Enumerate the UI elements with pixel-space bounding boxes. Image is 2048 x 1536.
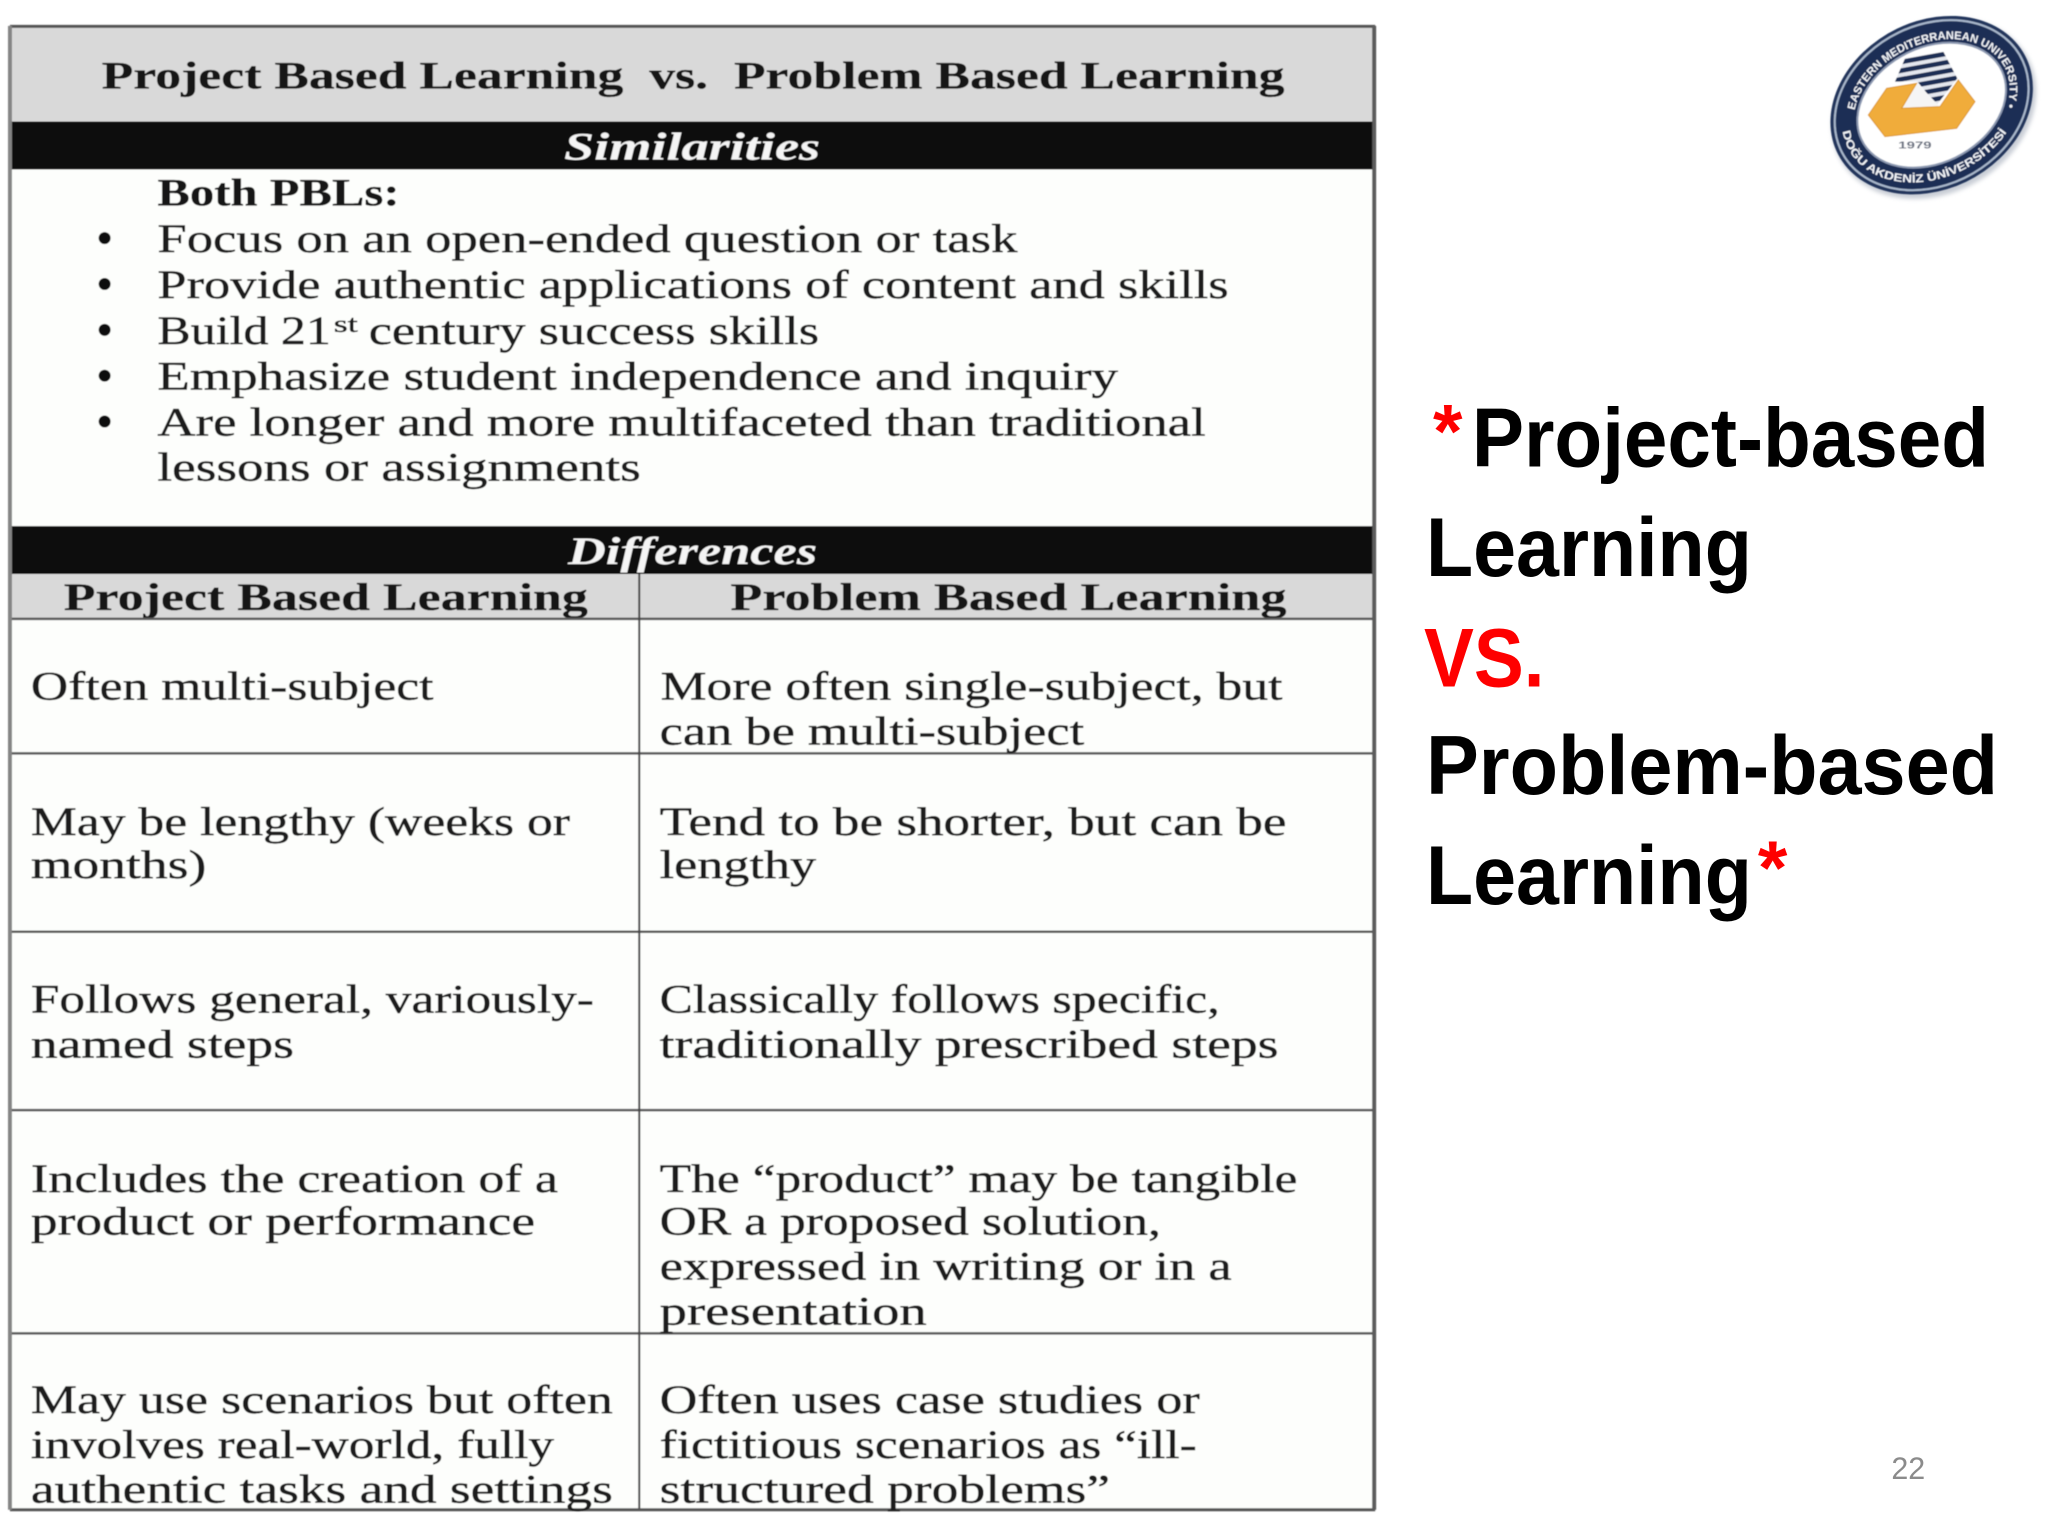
- icon: university seal logo: [1829, 15, 2038, 201]
- seal ring lettering: DOĞU AKDENİZ ÜNİVERSİTESİ: [1842, 126, 2007, 184]
- table rules: [10, 26, 1375, 1510]
- heading star: *: [1433, 389, 1463, 474]
- similarities list: Focus on an open-ended question or task: [157, 216, 1017, 261]
- row: scenarios: Often uses case studies or: [660, 1377, 1200, 1422]
- seal ring: [1830, 15, 2034, 196]
- row: duration: months): [31, 842, 206, 887]
- row: duration: [31, 799, 1286, 887]
- row: duration: Tend to be shorter, but can be: [660, 799, 1286, 844]
- row: steps: Classically follows specific,: [660, 976, 1220, 1021]
- row: scenarios: [31, 1377, 1200, 1512]
- side heading: [1424, 389, 1998, 922]
- column headers: Project Based Learning: [64, 576, 589, 619]
- similarities list: Are longer and more multifaceted than traditional: [157, 399, 1206, 444]
- comparison table: [10, 26, 1375, 1512]
- similarities list: century success skills: [369, 308, 819, 353]
- row: product: OR a proposed solution,: [660, 1199, 1161, 1244]
- row: scenarios: May use scenarios but often: [31, 1377, 613, 1422]
- seal orange emblem: [1868, 80, 1975, 137]
- similarities list: Both PBLs:: [157, 171, 400, 214]
- row: steps: traditionally prescribed steps: [660, 1021, 1279, 1066]
- seal ring lettering: EASTERN MEDITERRANEAN UNIVERSITY •: [1846, 30, 2018, 110]
- heading line: learning: Learning: [1426, 828, 1752, 922]
- row: duration: May be lengthy (weeks or: [31, 799, 570, 844]
- row: scenarios: authentic tasks and settings: [31, 1467, 613, 1512]
- heading line: project-based: Project-based: [1472, 390, 1989, 484]
- similarities heading band: Similarities: [564, 125, 820, 168]
- row: product: presentation: [660, 1288, 927, 1333]
- heading line: problem-based: Problem-based: [1426, 718, 1998, 812]
- differences heading band: Differences: [567, 530, 817, 573]
- table title band: [10, 27, 1375, 122]
- table title band: Project Based Learning vs. Problem Based Learning: [102, 55, 1285, 98]
- column headers: Problem Based Learning: [730, 576, 1287, 619]
- seal ring lettering: [1842, 30, 2018, 184]
- row: steps: named steps: [31, 1021, 294, 1066]
- similarities list: lessons or assignments: [157, 444, 641, 489]
- page number: 22: [1891, 1450, 1925, 1486]
- similarities list: Provide authentic applications of content and skills: [157, 262, 1229, 307]
- similarities list: Emphasize student independence and inquiry: [157, 354, 1118, 399]
- column headers: [10, 574, 1375, 619]
- heading end star: *: [1758, 826, 1788, 911]
- similarities list: Build 21: [157, 308, 331, 353]
- heading line: learning: Learning: [1426, 500, 1752, 594]
- row: product: expressed in writing or in a: [660, 1244, 1232, 1289]
- row: steps: Follows general, variously-: [31, 976, 594, 1021]
- row: product: product or performance: [31, 1199, 535, 1244]
- heading line: vs: VS.: [1424, 611, 1545, 705]
- seal striped emblem: [1894, 51, 1958, 104]
- similarities list: [99, 171, 1229, 489]
- differences heading band: [10, 526, 1375, 574]
- seal shadow: [1803, 0, 2048, 232]
- seal year: 1979: [1898, 140, 1932, 151]
- row: subject scope: [31, 664, 1282, 753]
- row: subject scope: Often multi-subject: [31, 664, 433, 709]
- row: scenarios: fictitious scenarios as “ill-: [660, 1422, 1197, 1467]
- row: duration: lengthy: [660, 842, 816, 887]
- row: subject scope: More often single-subject, but: [661, 664, 1282, 709]
- seal triangle opening: [1902, 83, 1940, 108]
- similarities list: st: [334, 312, 358, 338]
- row: product: [31, 1156, 1297, 1333]
- row: product: Includes the creation of a: [31, 1156, 558, 1201]
- table background: [10, 26, 1375, 1510]
- row: scenarios: involves real-world, fully: [31, 1422, 554, 1467]
- row: steps: [31, 976, 1279, 1066]
- similarities heading band: [10, 122, 1375, 169]
- row: product: The “product” may be tangible: [660, 1156, 1297, 1201]
- row: subject scope: can be multi-subject: [660, 708, 1084, 753]
- row: scenarios: structured problems”: [660, 1467, 1110, 1512]
